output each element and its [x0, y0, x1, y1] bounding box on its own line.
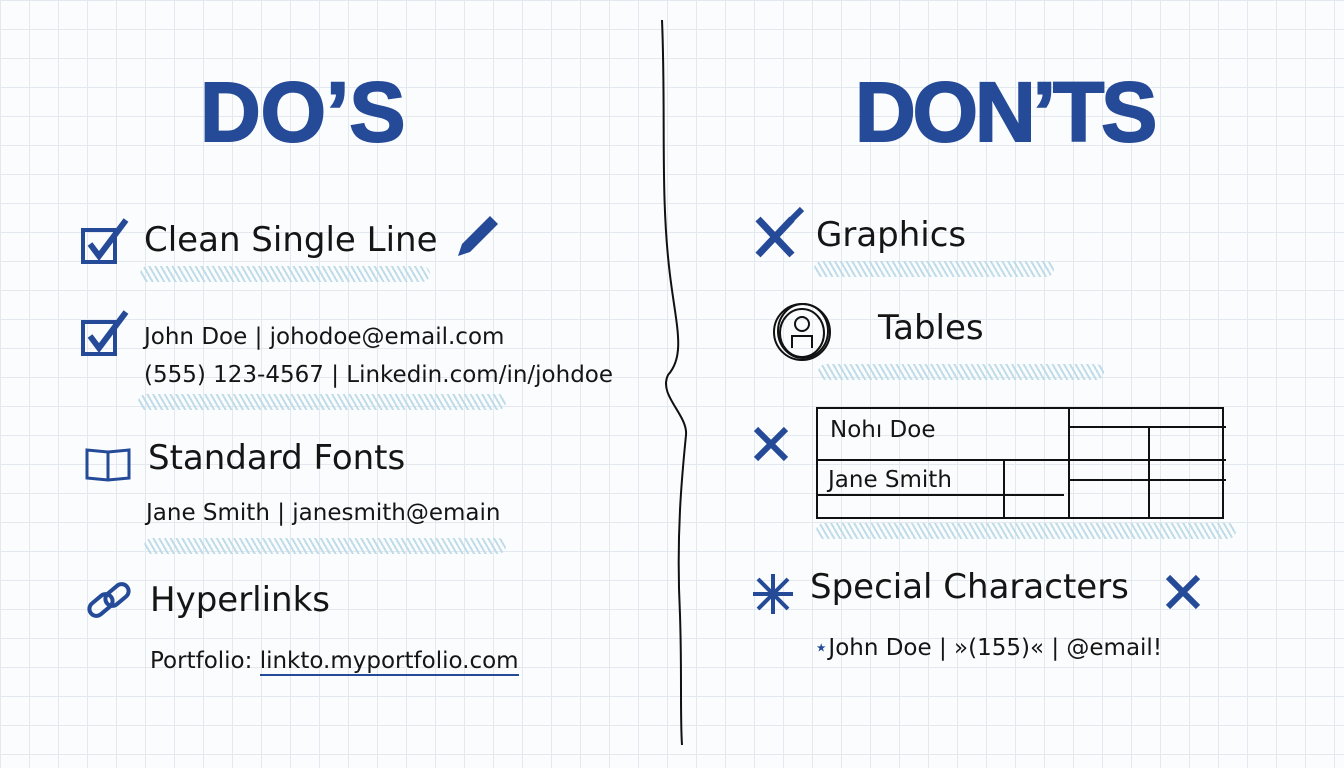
heading: Tables	[878, 308, 984, 348]
heading: Graphics	[816, 215, 966, 255]
icon: checkbox	[81, 218, 128, 264]
icon: x	[1166, 574, 1200, 610]
text: John Doe | johodoe@email.com	[144, 324, 504, 350]
title: don'ts: DON’TS	[855, 65, 1154, 159]
item: standard fonts	[86, 438, 506, 554]
icon: pen	[458, 216, 498, 256]
item: table example: Jane Smith	[828, 467, 952, 493]
icon: crossed pen	[756, 206, 804, 258]
item: contact line	[81, 310, 613, 410]
divider	[661, 20, 688, 746]
text: (555) 123-4567 | Linkedin.com/in/johdoe	[144, 362, 613, 388]
icon: scribbled person	[773, 303, 831, 361]
heading: Special Characters	[810, 567, 1129, 607]
title: do's: DO’S	[200, 65, 405, 159]
icon: x	[754, 426, 788, 462]
item: hyperlinks	[87, 580, 519, 676]
icon: asterisk	[753, 574, 793, 614]
item: tables	[773, 303, 1104, 380]
text	[142, 324, 613, 388]
text: Jane Smith | janesmith@emain	[146, 500, 500, 526]
heading: Hyperlinks	[150, 580, 330, 620]
heading: Clean Single Line	[144, 220, 437, 260]
table text: Nohı Doe	[830, 417, 936, 443]
item: clean single line	[81, 216, 498, 282]
icon: link	[87, 582, 131, 618]
item: graphics	[756, 206, 1054, 277]
item: table example	[754, 407, 1236, 539]
icon: book	[86, 448, 130, 482]
item: special characters	[753, 567, 1200, 661]
heading: Standard Fonts	[148, 438, 405, 478]
icon: checkbox	[81, 310, 128, 356]
text: Portfolio: linkto.myportfolio.com	[150, 648, 519, 674]
text: ⋆John Doe | »(155)« | @email!	[814, 635, 1162, 661]
table	[816, 407, 1226, 519]
